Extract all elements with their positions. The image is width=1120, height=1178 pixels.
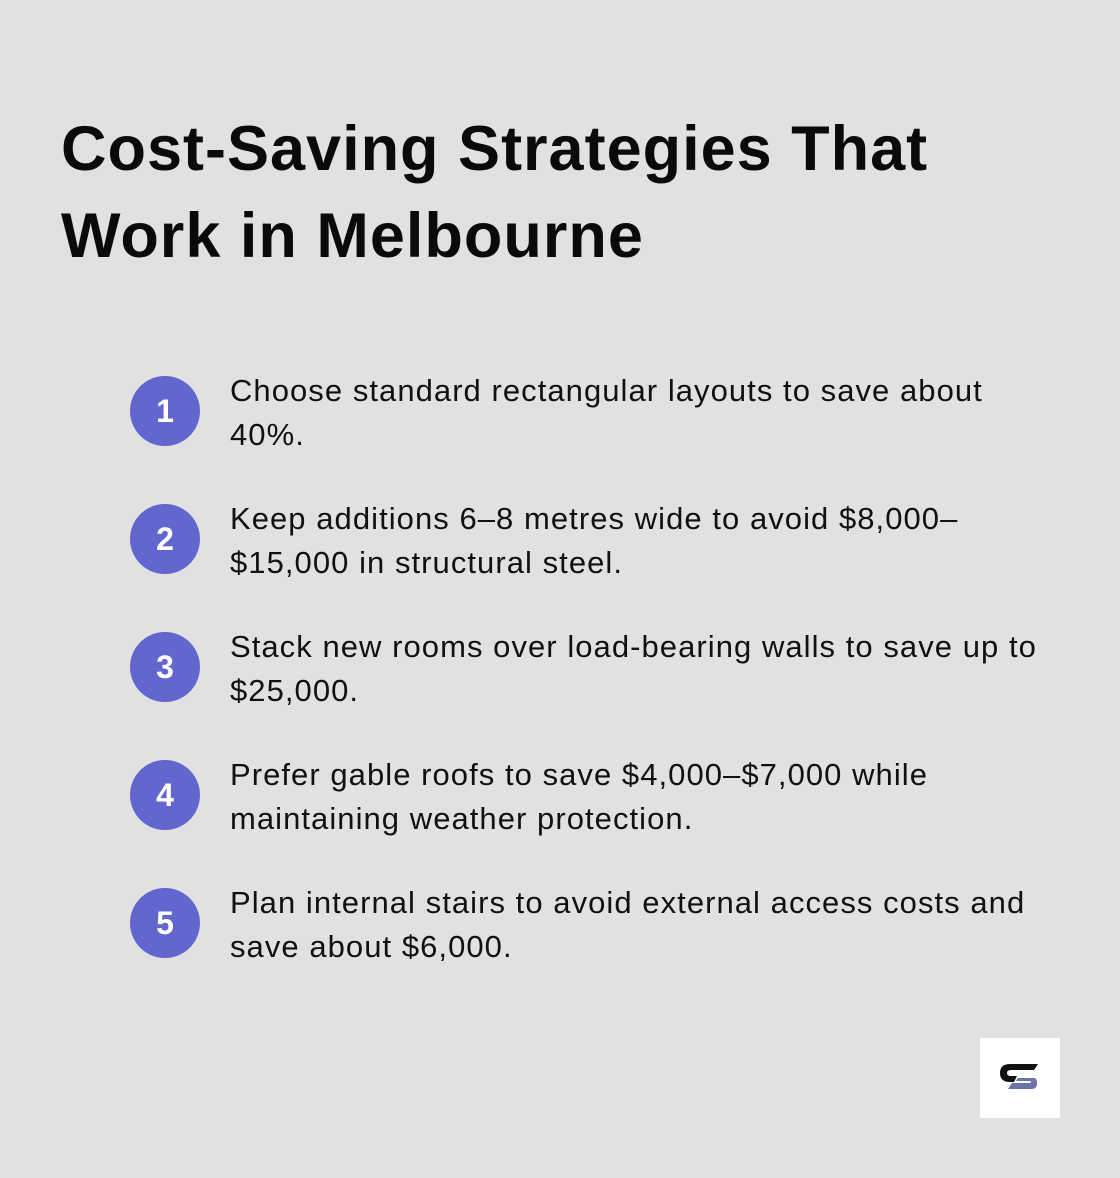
text 4: Prefer gable roofs to save $4,000–$7,000 while [230,757,928,792]
badge 4 [130,760,200,830]
badge 4: 4 [156,777,174,813]
text 1 [230,373,983,452]
item 3 [130,629,1037,708]
text 3: $25,000. [230,673,359,708]
badge 1: 1 [156,393,174,429]
text 3 [230,629,1037,708]
text 5: Plan internal stairs to avoid external access costs and [230,885,1025,920]
badge 5 [130,888,200,958]
text 4 [230,757,928,836]
title: Cost-Saving Strategies That [61,114,928,184]
text 3: Stack new rooms over load-bearing walls to save up to [230,629,1037,664]
badge 5: 5 [156,905,174,941]
item 5 [130,885,1025,964]
title: Work in Melbourne [61,201,644,271]
badge 3: 3 [156,649,174,685]
text 2: $15,000 in structural steel. [230,545,623,580]
text 2: Keep additions 6–8 metres wide to avoid $8,000– [230,501,958,536]
text 5 [230,885,1025,964]
title [61,114,928,271]
item 1 [130,373,983,452]
badge 2 [130,504,200,574]
text 1: 40%. [230,417,305,452]
badge 3 [130,632,200,702]
text 5: save about $6,000. [230,929,513,964]
text 2 [230,501,958,580]
item 2 [130,501,958,580]
badge 2: 2 [156,521,174,557]
text 1: Choose standard rectangular layouts to save about [230,373,983,408]
text 4: maintaining weather protection. [230,801,693,836]
item 4 [130,757,928,836]
badge 1 [130,376,200,446]
logo [980,1038,1060,1118]
